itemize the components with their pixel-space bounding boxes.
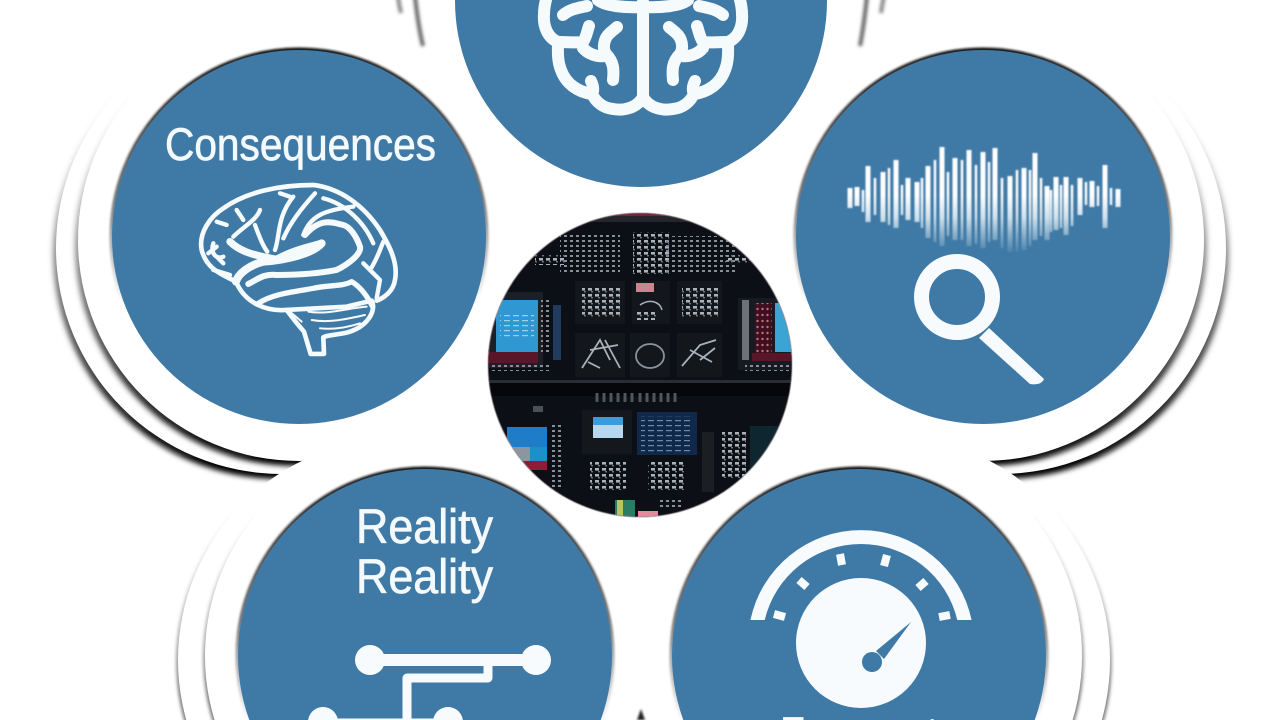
icon: speed gauge xyxy=(750,530,972,708)
panel: Reality circle xyxy=(238,468,612,720)
vent slats xyxy=(597,393,675,402)
icon: symmetric brain xyxy=(544,0,742,110)
lower centre displays xyxy=(590,412,780,517)
heading: Reality repeated xyxy=(356,501,493,604)
heading: Consequences: Consequences xyxy=(165,119,436,170)
icon: circuit nodes xyxy=(308,645,551,720)
heading: Reality repeated: Reality xyxy=(356,551,493,604)
lower left display xyxy=(507,406,563,489)
top switch row xyxy=(535,232,760,274)
shadow rings: lower right circle xyxy=(975,460,1114,720)
shadow rings: right circle xyxy=(989,124,1233,482)
panel: waveform and magnifier circle xyxy=(796,50,1170,424)
photo rim xyxy=(488,213,792,517)
heading: Reality repeated: Reality xyxy=(356,501,493,554)
icon: magnifying glass xyxy=(922,262,1044,384)
panel: Consequences circle xyxy=(112,50,486,424)
upper central display grid xyxy=(581,283,718,369)
panel: gauge circle xyxy=(672,468,1046,720)
shadow rings: top circle xyxy=(398,0,884,46)
panel: top circle with brain icon xyxy=(455,0,827,187)
right display xyxy=(738,298,798,371)
shadow rings: lower left circle xyxy=(174,460,308,720)
left display xyxy=(488,292,561,371)
icon: audio waveform xyxy=(850,147,1118,252)
glareshield band xyxy=(480,380,800,383)
photo: cockpit instrument panel xyxy=(480,205,800,525)
small shadow tip between lower circles xyxy=(637,709,645,720)
shadow rings: left circle xyxy=(49,124,302,484)
icon: side view brain xyxy=(201,185,396,354)
